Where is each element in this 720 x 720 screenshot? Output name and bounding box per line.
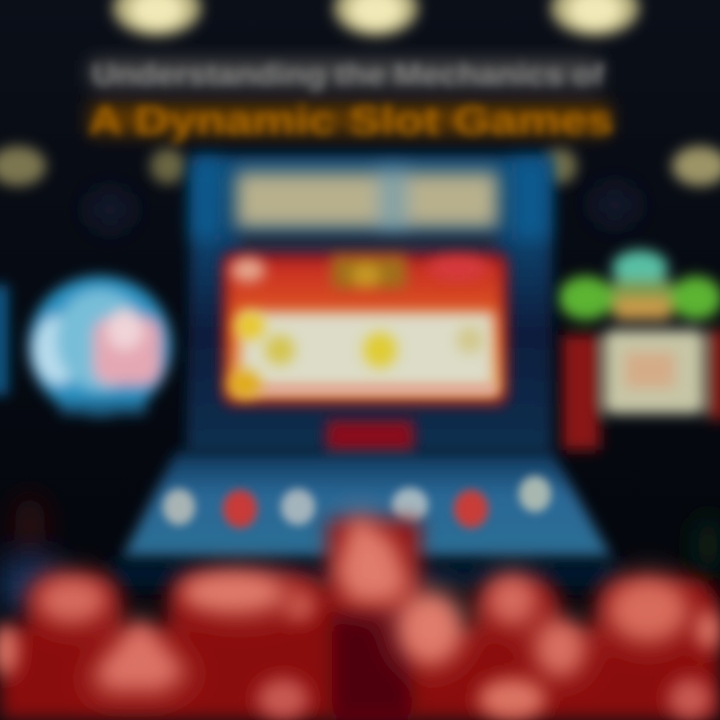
title text [88, 57, 614, 143]
grey button 2 [281, 489, 315, 525]
red button 2 [454, 490, 488, 528]
bright side panels [192, 160, 548, 240]
red base under screen [326, 420, 414, 456]
shadowed centre stack [332, 610, 412, 720]
chip highlights [32, 505, 694, 698]
grey button 3 [392, 488, 428, 522]
right green machine [558, 250, 720, 450]
grey button 4 [519, 476, 551, 512]
sign shadow [240, 238, 496, 248]
control deck [122, 452, 612, 558]
title line 1: Understanding the Mechanics of [92, 57, 605, 92]
title glow bands [90, 60, 610, 134]
lower dark band [110, 562, 620, 586]
dark red chip stacks [0, 520, 720, 720]
title [88, 57, 614, 143]
ceiling lights [0, 0, 720, 186]
cabinet frame [186, 155, 552, 452]
screen [222, 252, 508, 406]
grey button 1 [163, 489, 195, 525]
chip highlight cores [0, 518, 720, 720]
title line 2: A Dynamic Slot Games [88, 99, 614, 143]
poker chip stacks [0, 505, 720, 720]
white reel panel [240, 312, 494, 388]
yellow symbols [229, 312, 484, 398]
central machine cabinet [186, 155, 552, 456]
red button 1 [223, 490, 257, 528]
top sign [236, 168, 498, 232]
top reel details [231, 256, 488, 288]
left wheel machine [0, 276, 172, 416]
buttons [163, 476, 551, 528]
background dim glows [0, 185, 720, 610]
